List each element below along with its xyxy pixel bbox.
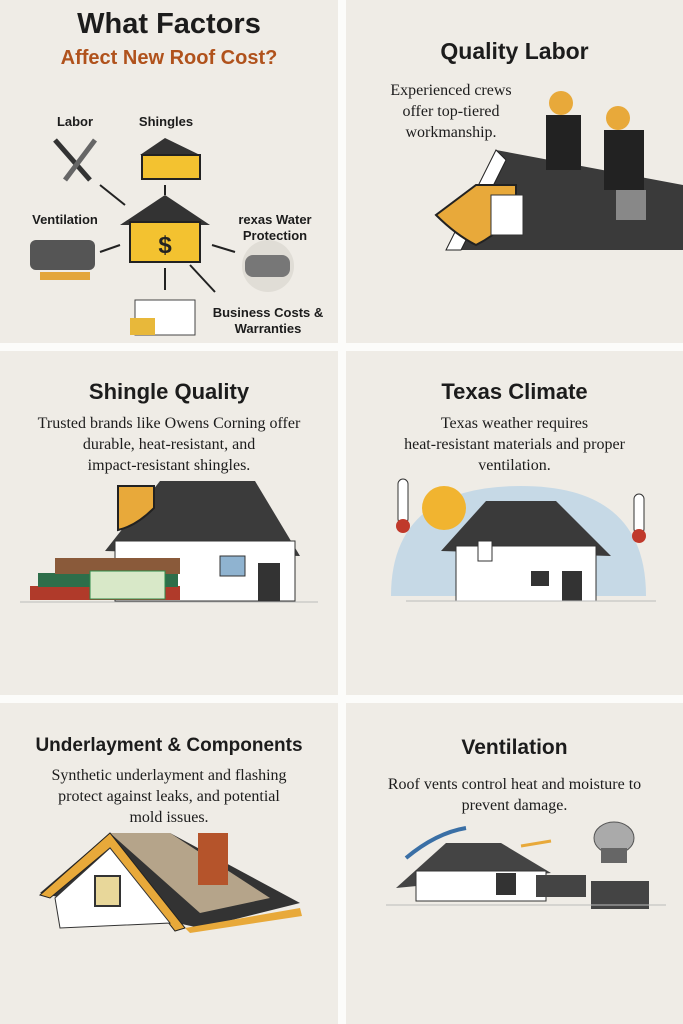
panel: factors overview xyxy=(0,0,338,343)
heading: Ventilation xyxy=(461,736,568,759)
label: business costs: Business Costs & Warranties xyxy=(213,305,323,336)
text block xyxy=(388,776,641,814)
panel: quality labor xyxy=(346,0,683,343)
text block xyxy=(51,767,287,826)
text block xyxy=(404,415,625,474)
illustration: roof vents xyxy=(386,822,666,909)
text block xyxy=(390,82,512,141)
panel: underlayment xyxy=(0,703,338,1024)
text block: heat-resistant materials and proper xyxy=(404,436,625,453)
text block: protect against leaks, and potential xyxy=(58,788,280,805)
text block: workmanship. xyxy=(405,124,497,141)
illustration: house with shingle bundles xyxy=(20,481,318,602)
text block: ventilation. xyxy=(478,457,551,474)
text block: prevent damage. xyxy=(462,797,567,814)
text block: impact-resistant shingles. xyxy=(88,457,250,474)
heading: Texas Climate xyxy=(441,379,588,404)
label: shingles: Shingles xyxy=(139,114,193,129)
text block: Experienced crews xyxy=(390,82,512,99)
subtitle: Affect New Roof Cost? xyxy=(61,47,277,69)
text block: Synthetic underlayment and flashing xyxy=(51,767,287,784)
label: water protection: rexas Water Protection xyxy=(238,212,312,243)
diagram icons xyxy=(30,138,294,336)
text block: mold issues. xyxy=(129,809,209,826)
heading: Quality Labor xyxy=(440,38,589,64)
illustration: roofers xyxy=(434,91,683,250)
label: labor: Labor xyxy=(57,114,93,129)
illustration: roof with chimney xyxy=(39,832,302,933)
panel: ventilation xyxy=(346,703,683,1024)
illustration: house in weather xyxy=(391,478,656,602)
text block: Trusted brands like Owens Corning offer xyxy=(38,415,300,432)
title: What Factors xyxy=(77,8,261,40)
text block xyxy=(38,415,300,474)
text block: Texas weather requires xyxy=(441,415,588,432)
panel: texas climate xyxy=(346,351,683,695)
text block: offer top-tiered xyxy=(402,103,500,120)
text block: durable, heat-resistant, and xyxy=(83,436,255,453)
heading: Underlayment & Components xyxy=(35,735,303,756)
label: ventilation: Ventilation xyxy=(32,212,98,227)
panel: shingle quality xyxy=(0,351,338,695)
diagram icons: $ xyxy=(158,232,172,259)
text block: Roof vents control heat and moisture to xyxy=(388,776,641,793)
heading: Shingle Quality xyxy=(89,379,249,404)
